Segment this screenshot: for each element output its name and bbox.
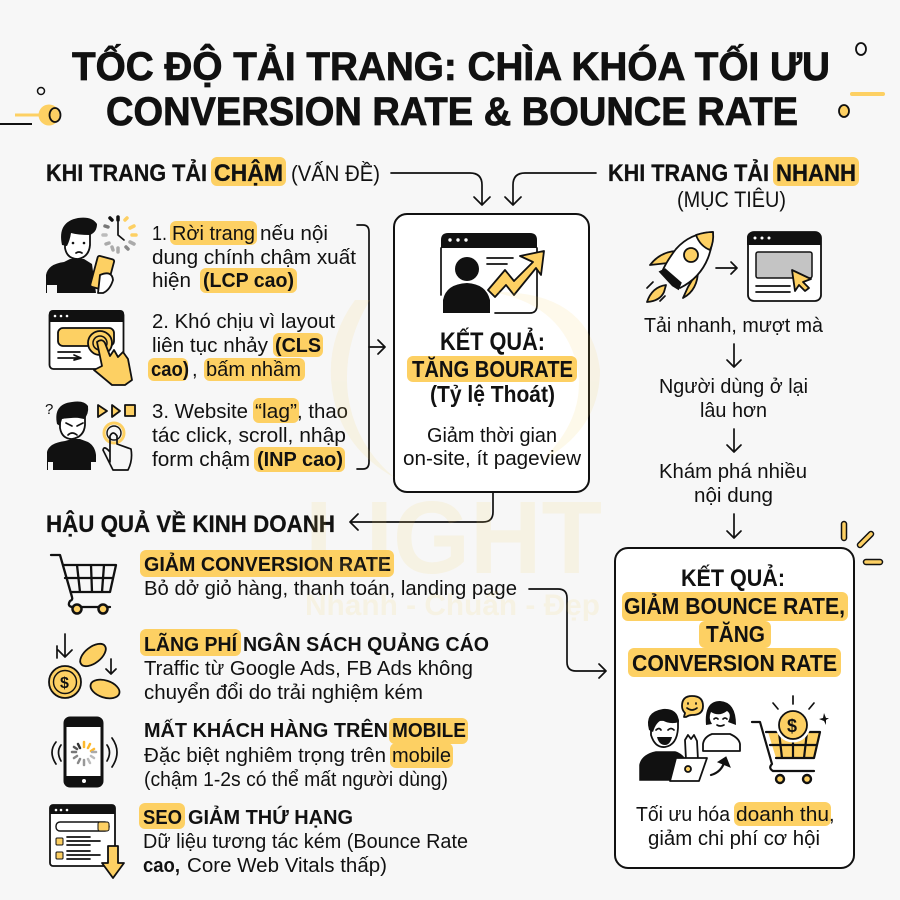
text: issue 2: liên tục nhảy [152,335,268,357]
text: success detail [636,802,835,850]
icon: happy users [640,696,740,781]
text: issue 2: 2. Khó chịu vì layout [152,311,335,333]
icon: frustrated user with lag [45,401,135,470]
icon: rising chart with person [441,233,544,313]
icon: phone loading [52,718,117,786]
text: impact 1: Bỏ dở giỏ hàng, thanh toán, landing page [144,578,517,600]
heading: fast load: NHANH [776,160,856,187]
heading: slow load [46,157,380,187]
text: issue 1: Rời trang [172,223,255,245]
text: issue 2: (CLS [275,335,321,357]
icon: SEO rank drop [50,805,124,878]
title: CONVERSION RATE & BOUNCE RATE [106,90,798,134]
text: fast step 3: Khám phá nhiều [659,461,807,483]
icon: falling coins: $ [60,675,69,692]
text: success heading: TĂNG [706,620,765,647]
text: result heading: TĂNG BOURATE [412,355,573,382]
icon: frustrated user with lag: ? [45,401,53,418]
decoration: title left accents [0,88,60,126]
arrow: step 2 to 3 [727,429,741,452]
icon: layout shift with tapping hand [49,310,132,385]
text: impact 3: Đặc biệt nghiêm trọng trên [144,745,386,767]
heading: business impact: HẬU QUẢ VỀ KINH DOANH [46,509,335,538]
heading: fast load [608,157,859,212]
text: success detail: , [829,804,835,826]
text: issue 1: (LCP cao) [203,270,294,292]
text: result heading: KẾT QUẢ: [440,326,545,356]
icon: falling coins [49,634,122,702]
arrow: step 1 to 2 [727,344,741,367]
arrow: impact to success result [529,589,606,678]
text: issue 1 [152,221,356,293]
text: impact 2: Traffic từ Google Ads, FB Ads không [144,658,473,680]
text: impact 1 [140,550,517,600]
icon: browser with cursor [747,232,821,301]
icon: rocket [647,232,713,302]
text: result detail: on-site, ít pageview [403,448,582,470]
text: issue 3: 3. Website [152,401,248,423]
text: impact 4: SEO [143,807,182,829]
icon: cart with coin: $ [787,716,797,736]
text: impact 3: MẤT KHÁCH HÀNG TRÊN [144,718,388,742]
text: issue 1: 1. [152,223,167,245]
text: issue 3: (INP cao) [257,449,343,471]
watermark: light logo: Nhanh - Chuẩn - Đẹp [305,589,600,622]
text: issue 2: bấm nhầm [206,359,301,381]
text: impact 2: LÃNG PHÍ [144,633,237,656]
text: issue 3: tác click, scroll, nhập [152,425,346,447]
text: fast step 3 [659,461,807,507]
text: issue 3: , thao [297,401,348,423]
arrow: slow heading to result [391,173,490,205]
text: success detail: Tối ưu hóa [636,804,731,826]
text: issue 2: , [192,359,198,381]
text: impact 4: GIẢM THỨ HẠNG [188,805,353,829]
text: fast step 3: nội dung [694,485,773,507]
bracket: issues converge [357,225,369,469]
text: success heading: GIẢM BOUNCE RATE, [624,591,845,619]
decoration: title right accents [839,43,883,117]
result panel: success [615,548,854,868]
icon: user waiting with phone [46,217,136,293]
text: impact 4: Dữ liệu tương tác kém (Bounce Rate [143,831,468,853]
heading: fast load: KHI TRANG TẢI [608,158,769,187]
text: issue 1: dung chính chậm xuất [152,247,356,269]
text: result detail: Giảm thời gian [427,425,557,447]
arrow: step 3 to result [727,514,741,538]
heading: slow load: CHẬM [214,159,283,187]
icon: cart with coin [752,696,829,783]
text: impact 4 [139,803,468,877]
icon: shopping cart [51,555,116,614]
heading: slow load: KHI TRANG TẢI [46,158,207,187]
text: impact 1: GIẢM CONVERSION RATE [144,553,391,576]
text: impact 3 [144,718,468,791]
text: issue 3: “lag” [255,401,297,423]
title: TỐC ĐỘ TẢI TRANG: CHÌA KHÓA TỐI ƯU [72,43,830,89]
text: fast step 2: lâu hơn [700,400,767,422]
text: impact 3: mobile [392,745,451,767]
text: issue 3 [152,398,348,472]
arrow: result to business impact [350,492,493,530]
watermark: light logo [305,292,602,622]
text: impact 4: Core Web Vitals thấp) [187,855,387,877]
text: issue 1: nếu nội [260,223,328,245]
text: result heading: (Tỷ lệ Thoát) [430,381,555,407]
heading: fast load: (MỤC TIÊU) [677,187,786,212]
text: result heading [407,326,577,407]
text: issue 2 [148,311,335,381]
text: impact 3: MOBILE [392,720,466,742]
arrow: issues to result [369,340,385,354]
text: impact 2: NGÂN SÁCH QUẢNG CÁO [243,632,489,656]
text: impact 2: chuyển đổi do trải nghiệm kém [144,682,423,704]
text: success detail: giảm chi phí cơ hội [648,828,820,850]
text: result detail [403,425,582,470]
text: issue 3: form chậm [152,449,250,471]
arrow: fast heading to result [505,173,596,205]
text: fast step 1: Tải nhanh, mượt mà [644,315,824,337]
text: issue 2: cao) [151,359,189,381]
text: issue 1: hiện [152,270,191,292]
text: fast step 2 [659,376,808,422]
text: success heading [622,563,848,677]
text: impact 2 [140,629,489,704]
title [72,43,830,134]
watermark: light logo: LIGHT [305,480,602,595]
text: success heading: KẾT QUẢ: [681,563,785,592]
result panel: bounce rate rises [394,214,589,492]
text: impact 4: cao, [143,855,180,877]
text: success heading: CONVERSION RATE [632,650,837,676]
text: fast step 2: Người dùng ở lại [659,376,808,398]
heading: slow load: (VẤN ĐỀ) [291,161,380,186]
icon: success sparkle rays [844,524,880,562]
text: impact 3: (chậm 1-2s có thể mất người dùng) [144,769,448,791]
text: success detail: doanh thu [736,804,829,826]
arrow: rocket to browser [716,262,737,274]
